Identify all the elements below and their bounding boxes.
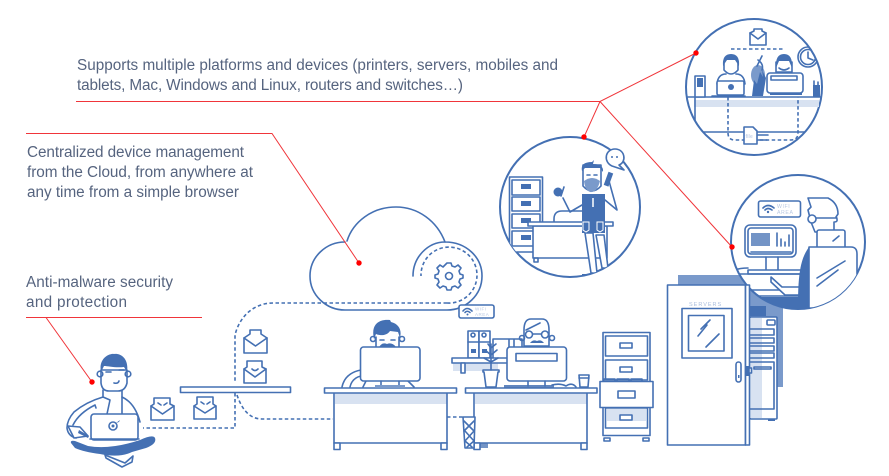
icon: envelope happy upper <box>244 330 267 353</box>
person with laptop sitting <box>67 354 155 467</box>
drawer handles <box>618 343 635 420</box>
text block: anti-malware: and protection <box>26 294 127 311</box>
text block: cloud management: Centralized device management <box>27 144 245 161</box>
heading text: platforms <box>77 57 558 94</box>
wall shelf with binders <box>452 331 522 373</box>
panel: filing cabinet <box>600 332 653 441</box>
icon: envelope angry left <box>151 398 174 420</box>
cloud <box>310 207 482 310</box>
icon: plant <box>751 56 766 96</box>
wifi area badge: WIFI <box>475 306 486 312</box>
icon: wall clock <box>798 47 818 67</box>
desk and keyboard <box>738 267 808 308</box>
panel: servers door <box>668 285 752 445</box>
technician at chair <box>798 198 857 308</box>
label: servers: SERVERS <box>689 302 722 308</box>
icon: gear <box>435 263 463 290</box>
panel: left desk <box>324 320 456 450</box>
dashed network lines <box>143 247 477 428</box>
panel: server shelving <box>678 275 783 421</box>
shelf with envelopes <box>180 330 290 392</box>
panel: circle man on phone <box>500 137 640 277</box>
panel: circle team office <box>686 19 822 155</box>
person with glasses <box>504 319 576 388</box>
cup <box>579 375 589 387</box>
plant in pot <box>483 344 499 387</box>
filing cabinet <box>510 177 542 252</box>
text block: cloud management <box>27 144 254 201</box>
icon: printer <box>695 76 705 97</box>
text block: cloud management: from the Cloud, from anywhere at <box>27 164 254 181</box>
person at monitor <box>767 54 803 95</box>
heading text: platforms: Supports multiple platforms and devices (printers, servers, mobiles and <box>77 57 558 74</box>
wifi area badge <box>758 201 800 217</box>
icon: file: file <box>746 134 753 140</box>
heading text: platforms: tablets, Mac, Windows and Linux, routers and switches…) <box>77 77 463 94</box>
wifi area badge: AREA <box>475 312 489 317</box>
speech bubble <box>606 149 624 170</box>
person at computer <box>342 320 420 388</box>
wifi area badge: WIFI <box>777 204 790 210</box>
callout lines <box>26 50 735 385</box>
icon: envelope happy lower <box>244 361 266 383</box>
text block: anti-malware <box>26 274 173 311</box>
monitor <box>745 225 802 274</box>
text block: anti-malware: Anti-malware security <box>26 274 173 291</box>
wastebasket <box>463 417 488 448</box>
icon: pen holder <box>813 81 820 97</box>
door window <box>682 308 732 358</box>
desk <box>528 211 613 262</box>
icon: envelope angry right <box>194 397 216 419</box>
person with laptop <box>712 54 745 96</box>
callout dots <box>89 50 735 385</box>
wifi area badge: AREA <box>777 210 794 216</box>
icon: envelope <box>750 29 766 45</box>
panel: right desk <box>452 319 597 450</box>
text block: cloud management: any time from a simple browser <box>27 184 239 201</box>
wifi area badge <box>459 305 494 318</box>
man <box>554 160 617 276</box>
panel: circle technician <box>731 175 865 315</box>
door handle <box>736 362 752 382</box>
